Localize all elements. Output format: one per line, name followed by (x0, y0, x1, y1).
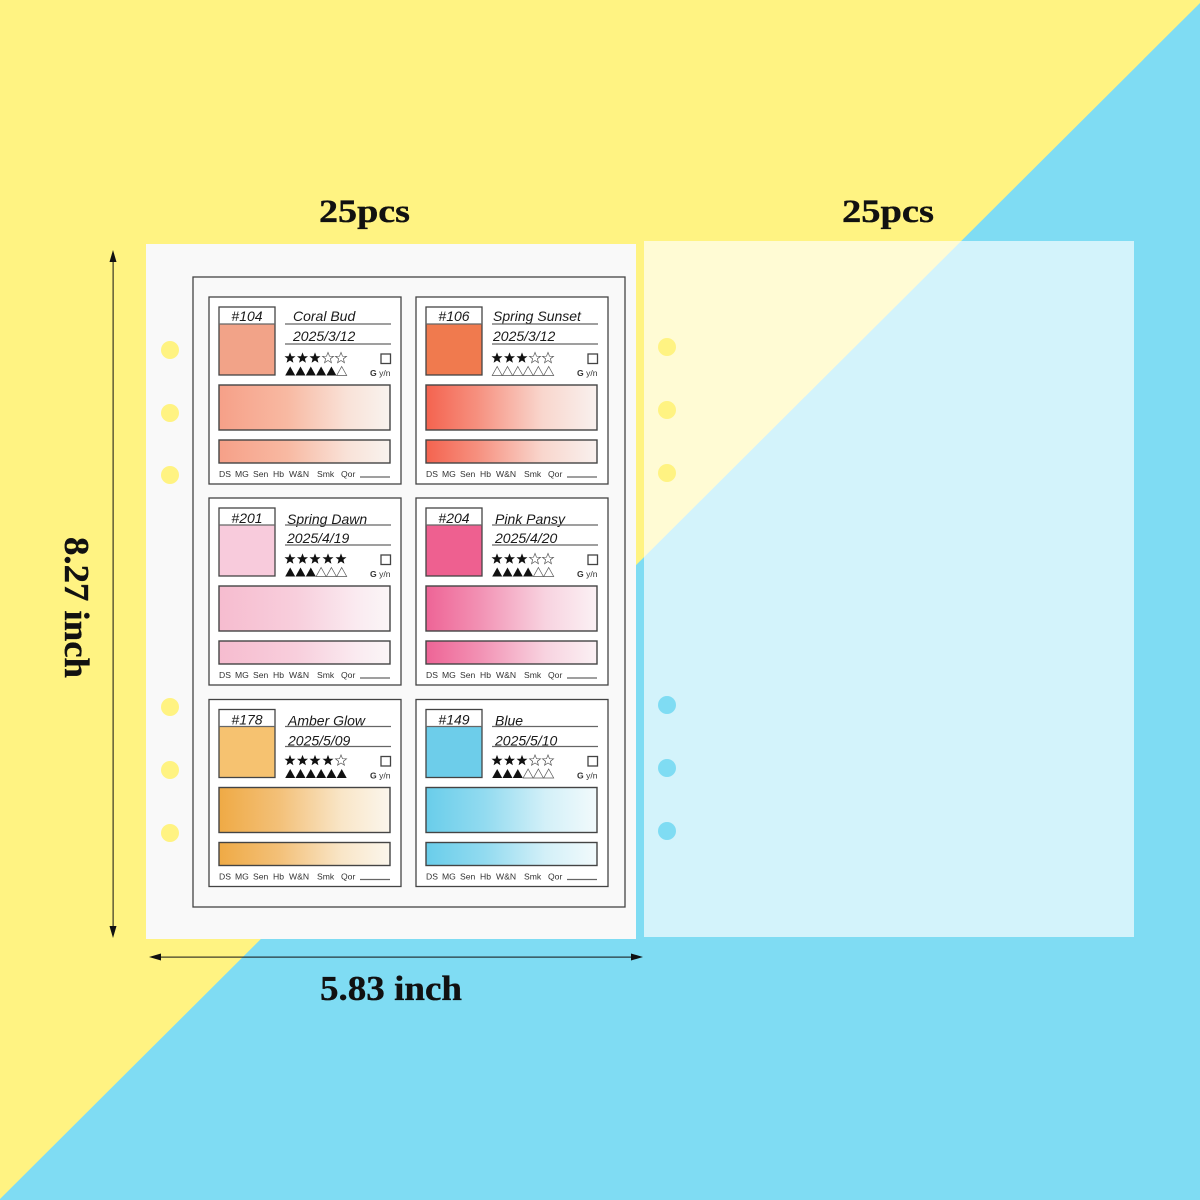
card: #149 Blue: Sen (460, 872, 476, 882)
card: #104 Coral Bud: Sen (253, 469, 269, 479)
card: #201 Spring Dawn: #201 (231, 510, 263, 526)
card: #106 Spring Sunset: Smk (524, 469, 542, 479)
translucent sheet body (644, 241, 1134, 937)
card: #104 Coral Bud: G y/n (370, 368, 391, 378)
label: height 8.27 inch: 8.27 inch (57, 537, 96, 678)
card: #201 Spring Dawn: Hb (273, 670, 284, 680)
card: #149 Blue: W&N (496, 872, 516, 882)
heading: 25pcs printed sheets: 25pcs (319, 194, 410, 230)
card: #149 Blue: Qor (548, 872, 562, 882)
blue punch holes on transparent sheet (658, 696, 676, 840)
card: #178 Amber Glow: DS (219, 872, 231, 882)
card: #149 Blue: 2025/5/10 (494, 732, 557, 748)
sheet: blank transparent divider (644, 241, 1134, 937)
card: #201 Spring Dawn: DS (219, 670, 231, 680)
card: #204 Pink Pansy: Hb (480, 670, 491, 680)
card: #204 Pink Pansy: W&N (496, 670, 516, 680)
card: #178 Amber Glow: Qor (341, 872, 355, 882)
outer page frame (193, 277, 625, 907)
card: #201 Spring Dawn: Qor (341, 670, 355, 680)
card: #178 Amber Glow: W&N (289, 872, 309, 882)
card: #149 Blue: Blue (495, 712, 523, 728)
paper (146, 244, 636, 939)
card: #104 Coral Bud: MG (235, 469, 249, 479)
card: #104 Coral Bud: 2025/3/12 (292, 328, 355, 344)
card: #106 Spring Sunset: Qor (548, 469, 562, 479)
card: #149 Blue: Smk (524, 872, 542, 882)
card: #104 Coral Bud: Qor (341, 469, 355, 479)
punch holes on paper (161, 341, 179, 842)
card: #178 Amber Glow: Sen (253, 872, 269, 882)
heading: 25pcs transparent sheets: 25pcs (842, 194, 934, 230)
yellow punch holes on transparent sheet (658, 338, 676, 482)
card: #106 Spring Sunset: W&N (496, 469, 516, 479)
card: #104 Coral Bud: Hb (273, 469, 284, 479)
card: #201 Spring Dawn: 2025/4/19 (286, 530, 349, 546)
label: width 5.83 inch: 5.83 inch (320, 969, 462, 1008)
card: #201 Spring Dawn: Spring Dawn (287, 511, 367, 527)
card: #204 Pink Pansy: 2025/4/20 (494, 530, 557, 546)
card: #204 Pink Pansy: Pink Pansy (495, 511, 566, 527)
card: #149 Blue: MG (442, 872, 456, 882)
card: #106 Spring Sunset (416, 297, 608, 484)
card: #104 Coral Bud: DS (219, 469, 231, 479)
arrow: vertical height dimension (110, 250, 116, 938)
card: #178 Amber Glow: Amber Glow (287, 712, 366, 728)
arrow: horizontal width dimension (149, 954, 643, 960)
card: #149 Blue: G y/n (577, 770, 598, 780)
card: #204 Pink Pansy: G y/n (577, 569, 598, 579)
card: #104 Coral Bud (209, 297, 401, 484)
card: #204 Pink Pansy: Qor (548, 670, 562, 680)
card: #104 Coral Bud: Coral Bud (293, 308, 356, 324)
card: #106 Spring Sunset: Sen (460, 469, 476, 479)
card: #204 Pink Pansy: #204 (438, 510, 470, 526)
card: #149 Blue: DS (426, 872, 438, 882)
card: #106 Spring Sunset: 2025/3/12 (492, 328, 555, 344)
card: #178 Amber Glow (209, 700, 401, 886)
card: #104 Coral Bud: Smk (317, 469, 335, 479)
card: #178 Amber Glow: MG (235, 872, 249, 882)
card: #201 Spring Dawn: W&N (289, 670, 309, 680)
card: #104 Coral Bud: #104 (231, 308, 263, 324)
card: #149 Blue: Hb (480, 872, 491, 882)
card: #178 Amber Glow: G y/n (370, 770, 391, 780)
card: #149 Blue (416, 700, 608, 886)
sheet: printed swatch page (146, 244, 636, 939)
card: #178 Amber Glow: #178 (231, 712, 263, 728)
card: #106 Spring Sunset: MG (442, 469, 456, 479)
card: #201 Spring Dawn: MG (235, 670, 249, 680)
card: #178 Amber Glow: 2025/5/09 (287, 732, 350, 748)
card: #201 Spring Dawn: Smk (317, 670, 335, 680)
card: #201 Spring Dawn (209, 498, 401, 685)
card: #204 Pink Pansy (416, 498, 608, 685)
card: #201 Spring Dawn: G y/n (370, 569, 391, 579)
card: #106 Spring Sunset: DS (426, 469, 438, 479)
card: #204 Pink Pansy: MG (442, 670, 456, 680)
card: #106 Spring Sunset: Spring Sunset (493, 308, 582, 324)
card: #106 Spring Sunset: G y/n (577, 368, 598, 378)
card: #178 Amber Glow: Hb (273, 872, 284, 882)
card: #204 Pink Pansy: DS (426, 670, 438, 680)
card: #149 Blue: #149 (438, 712, 470, 728)
card: #106 Spring Sunset: Hb (480, 469, 491, 479)
card: #178 Amber Glow: Smk (317, 872, 335, 882)
card: #106 Spring Sunset: #106 (438, 308, 470, 324)
card: #204 Pink Pansy: Sen (460, 670, 476, 680)
card: #201 Spring Dawn: Sen (253, 670, 269, 680)
card: #104 Coral Bud: W&N (289, 469, 309, 479)
card: #204 Pink Pansy: Smk (524, 670, 542, 680)
